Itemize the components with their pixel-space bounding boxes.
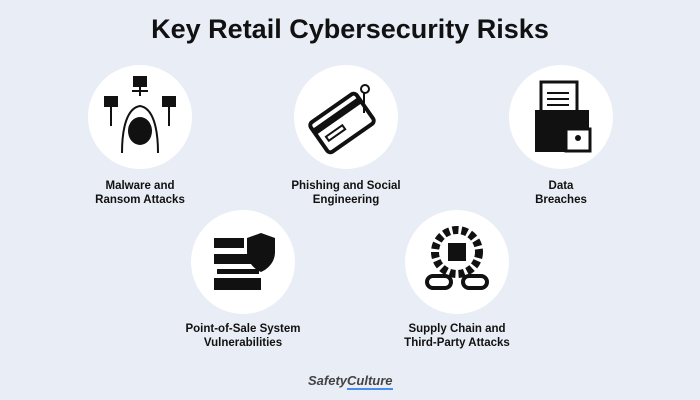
- icon: phishing card: [294, 65, 398, 169]
- label: supply chain: Supply Chain and: [408, 323, 506, 335]
- icon: supply chain gear: [405, 210, 509, 314]
- label: POS: [185, 323, 301, 349]
- label: phishing: [291, 180, 401, 206]
- label: supply chain: [404, 323, 510, 349]
- title: Key Retail Cybersecurity Risks: [151, 14, 549, 44]
- label: data breaches: Data: [549, 180, 573, 192]
- icon: POS firewall shield: [191, 210, 295, 314]
- label: phishing: Phishing and Social: [291, 180, 401, 192]
- label: phishing: Engineering: [313, 194, 379, 206]
- label: supply chain: Third-Party Attacks: [404, 337, 510, 349]
- label: malware: Malware and: [105, 180, 175, 192]
- label: malware: Ransom Attacks: [95, 194, 185, 206]
- icon: data breach folder: [509, 65, 613, 169]
- label: POS: Vulnerabilities: [204, 337, 282, 349]
- icon: malware hacker: [88, 65, 192, 169]
- label: malware: [95, 180, 185, 206]
- label: data breaches: Breaches: [535, 194, 587, 206]
- label: data breaches: [535, 180, 587, 206]
- logo: SafetyCulture: [308, 373, 393, 388]
- label: POS: Point-of-Sale System: [185, 323, 301, 335]
